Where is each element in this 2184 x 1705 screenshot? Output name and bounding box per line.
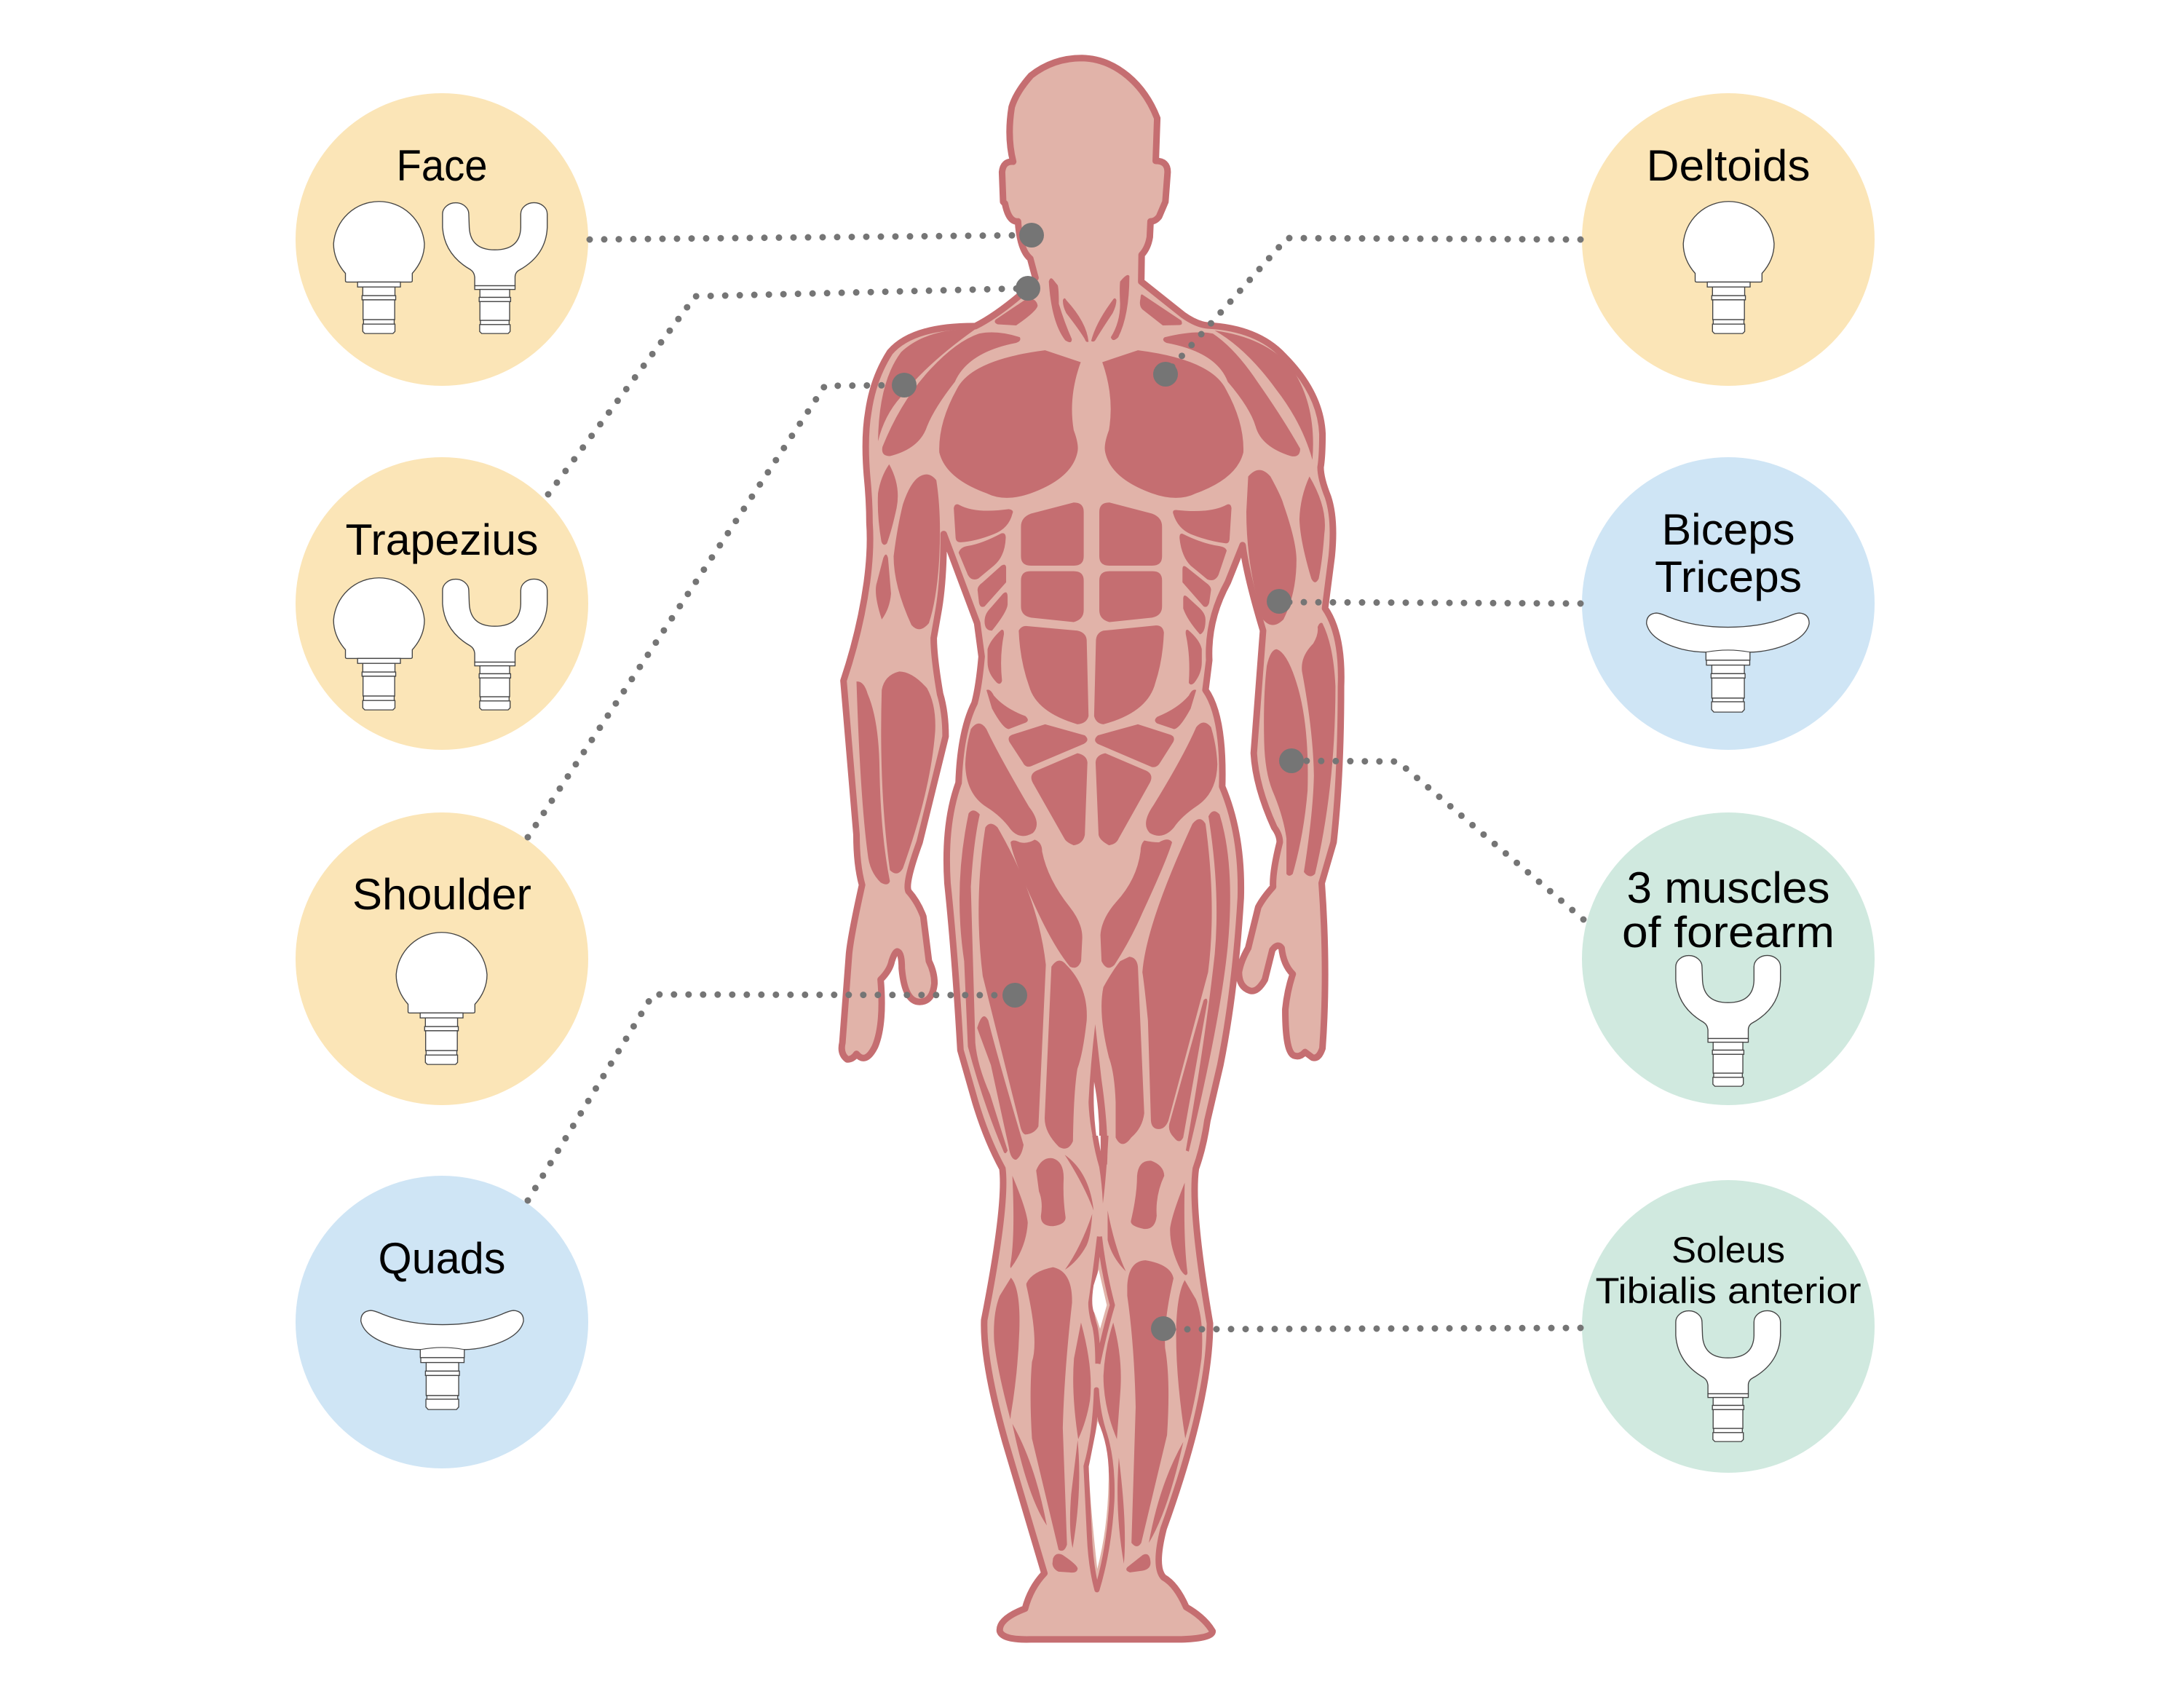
- forearm muscles: [856, 622, 1335, 885]
- connector: Trapezius: [548, 288, 1028, 494]
- left deltoid: [878, 329, 1021, 456]
- left leg muscles: [994, 1155, 1093, 1573]
- panel: 3 muscles of forearm: of forearm: [1622, 908, 1835, 957]
- heading: Soleus Tibialis anterior: Soleus: [1671, 1230, 1785, 1270]
- pelvic muscles: [965, 723, 1217, 845]
- heading: Quads: Quads: [379, 1234, 505, 1283]
- icon: fork head: [443, 579, 547, 710]
- trapezius: [994, 294, 1182, 325]
- marker dots: [892, 223, 1304, 1341]
- muscles: knees, calves and ankles: [994, 1136, 1202, 1590]
- human muscle figure: [842, 58, 1341, 1639]
- connector: Quads: [528, 994, 1015, 1200]
- panel: Biceps Triceps: Triceps: [1655, 553, 1802, 601]
- panel: Soleus Tibialis anterior: [1582, 1180, 1875, 1473]
- lower abdominals and obliques: [984, 593, 1206, 729]
- muscles: lower abdomen, forearms and thighs: [856, 593, 1335, 1165]
- connector: Biceps Triceps: [1279, 602, 1580, 604]
- heading: Shoulder: Shoulder: [352, 870, 531, 919]
- neck muscles: [1049, 275, 1129, 342]
- upper abdominals: [1021, 502, 1162, 622]
- heading: Trapezius: Trapezius: [345, 515, 539, 564]
- connector: Deltoids: [1166, 238, 1580, 374]
- right deltoid: [1163, 331, 1313, 460]
- icon: fork head: [1676, 1310, 1781, 1441]
- icon: ball head: [333, 202, 424, 333]
- left thigh muscles: [960, 810, 1087, 1160]
- crotch line between legs: [1088, 1024, 1107, 1165]
- serratus: [954, 505, 1232, 607]
- icon: curved pad head: [1647, 613, 1809, 712]
- panel: Trapezius: [296, 457, 588, 750]
- right thigh muscles: [1101, 811, 1230, 1152]
- pectorals: [939, 350, 1243, 498]
- panel: Face: [296, 93, 588, 386]
- upper arm muscles: [876, 464, 1325, 629]
- heading: 3 muscles of forearm: 3 muscles: [1626, 863, 1830, 912]
- gaps between the legs: [1092, 1136, 1109, 1203]
- icon: ball head: [1683, 202, 1774, 333]
- heading: Face: Face: [396, 141, 488, 190]
- icon: ball head: [396, 933, 487, 1064]
- heading: Biceps Triceps: Biceps: [1661, 505, 1795, 554]
- icon: ball head: [333, 578, 424, 710]
- panel: Shoulder: [296, 812, 588, 1105]
- connector: Face: [590, 235, 1032, 240]
- connector: Soleus: [1163, 1328, 1580, 1329]
- panel: Quads: [296, 1176, 588, 1468]
- heading: Deltoids: Deltoids: [1647, 141, 1810, 190]
- body outline: [842, 58, 1341, 1639]
- icon: fork head: [443, 202, 547, 333]
- muscles: shoulders, chest, upper abdomen and upper arms: [876, 275, 1325, 629]
- panel: Biceps Triceps: [1582, 457, 1875, 750]
- panel: Soleus Tibialis anterior: Tibialis anterior: [1596, 1270, 1861, 1311]
- connector: Shoulder: [528, 385, 904, 837]
- icon: fork head: [1676, 955, 1781, 1086]
- panel: Deltoids: [1582, 93, 1875, 386]
- panel: 3 muscles of forearm: [1582, 812, 1875, 1105]
- connector: forearm: [1291, 761, 1583, 919]
- icon: curved pad head: [361, 1310, 523, 1409]
- right leg muscles: [1104, 1160, 1202, 1573]
